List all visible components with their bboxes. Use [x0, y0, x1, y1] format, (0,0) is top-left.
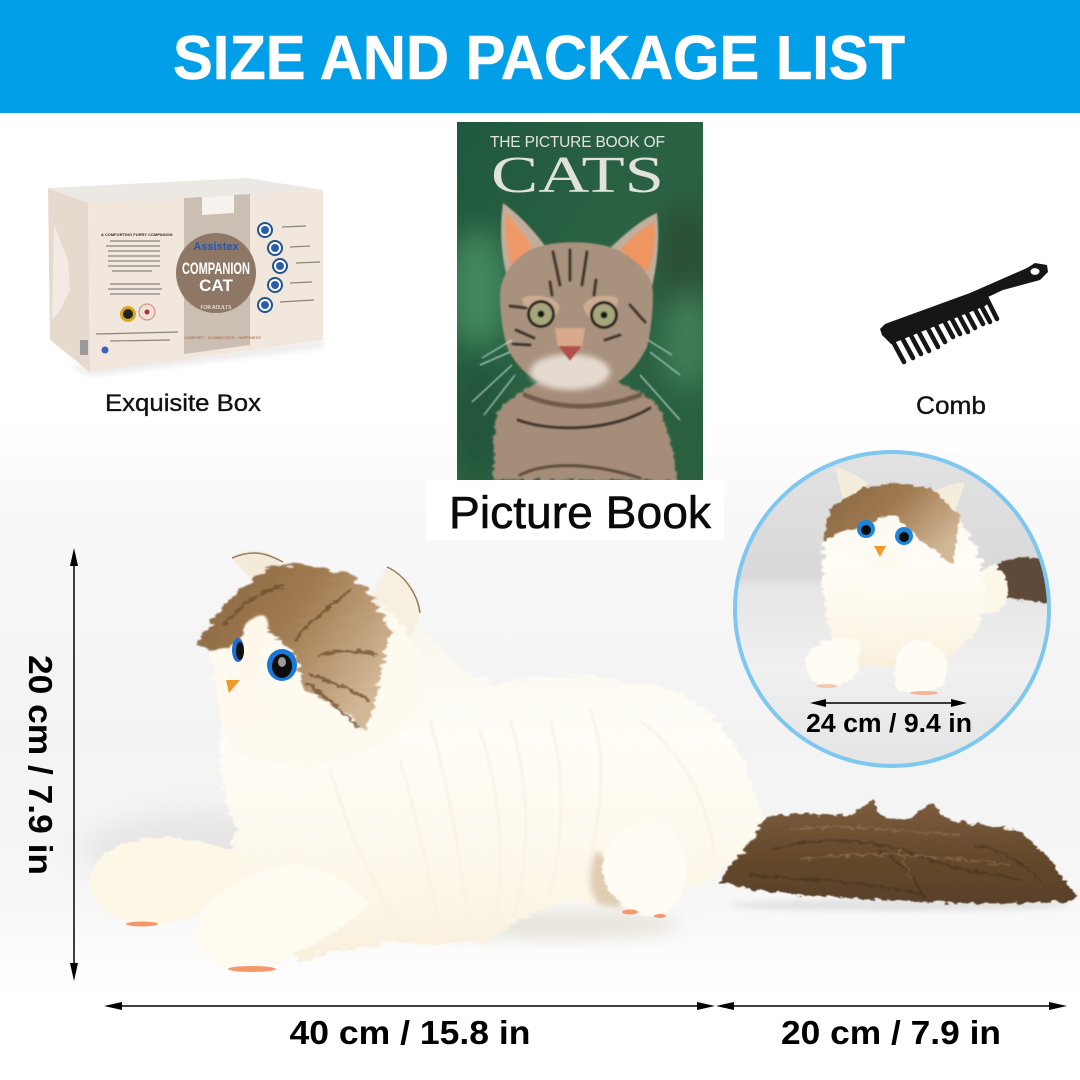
- label: height: 20 cm / 7.9 in: [21, 655, 58, 875]
- icon: comb: [880, 263, 1048, 362]
- cat tail: [720, 800, 1077, 904]
- header banner: [0, 0, 1080, 113]
- body length dimension: [104, 1002, 715, 1052]
- main cat photo: [80, 551, 1077, 972]
- title: SIZE AND PACKAGE LIST: [173, 24, 905, 93]
- cat fur shading: [330, 710, 715, 930]
- label: body length: 40 cm / 15.8 in: [290, 1015, 530, 1052]
- item: picture book: [452, 122, 712, 529]
- label background: [426, 480, 724, 540]
- inset width arrow: [810, 699, 967, 707]
- tail length dimension: [716, 1002, 1067, 1052]
- cat on the cover: [472, 203, 680, 480]
- height dimension: [21, 548, 78, 981]
- box illustration: A COMFORTING FURRY COMPANION: [101, 232, 173, 237]
- book title: THE PICTURE BOOK OF: [490, 134, 665, 151]
- inset: front view: [735, 452, 1050, 766]
- cat body: [220, 590, 763, 960]
- inset width label: 24 cm / 9.4 in: [806, 710, 972, 738]
- box illustration: [48, 178, 323, 376]
- arrow: tail length: [716, 1002, 1067, 1010]
- arrow: body length: [104, 1002, 715, 1010]
- cat head: [195, 551, 426, 767]
- cat legs and paws: [89, 822, 686, 969]
- box illustration: COMFORT · CONNECTION · HAPPINESS: [184, 335, 261, 340]
- book cover: [448, 122, 713, 480]
- label: tail length: 20 cm / 7.9 in: [781, 1015, 1001, 1052]
- label: exquisite box: Exquisite Box: [105, 390, 261, 417]
- box illustration: CAT: [199, 276, 233, 295]
- inset cat photo: [806, 467, 1050, 695]
- item: comb: [880, 263, 1048, 420]
- box illustration: Assistex: [193, 241, 240, 253]
- item: exquisite box: [48, 178, 323, 417]
- label: picture book: Picture Book: [449, 487, 712, 538]
- box illustration: COMPANION: [182, 259, 250, 278]
- paw pads: [126, 910, 666, 972]
- book cover: CATS: [491, 147, 664, 204]
- arrow: height: [70, 548, 78, 981]
- label: comb: Comb: [916, 392, 986, 420]
- box illustration: FOR ADULTS: [200, 305, 232, 311]
